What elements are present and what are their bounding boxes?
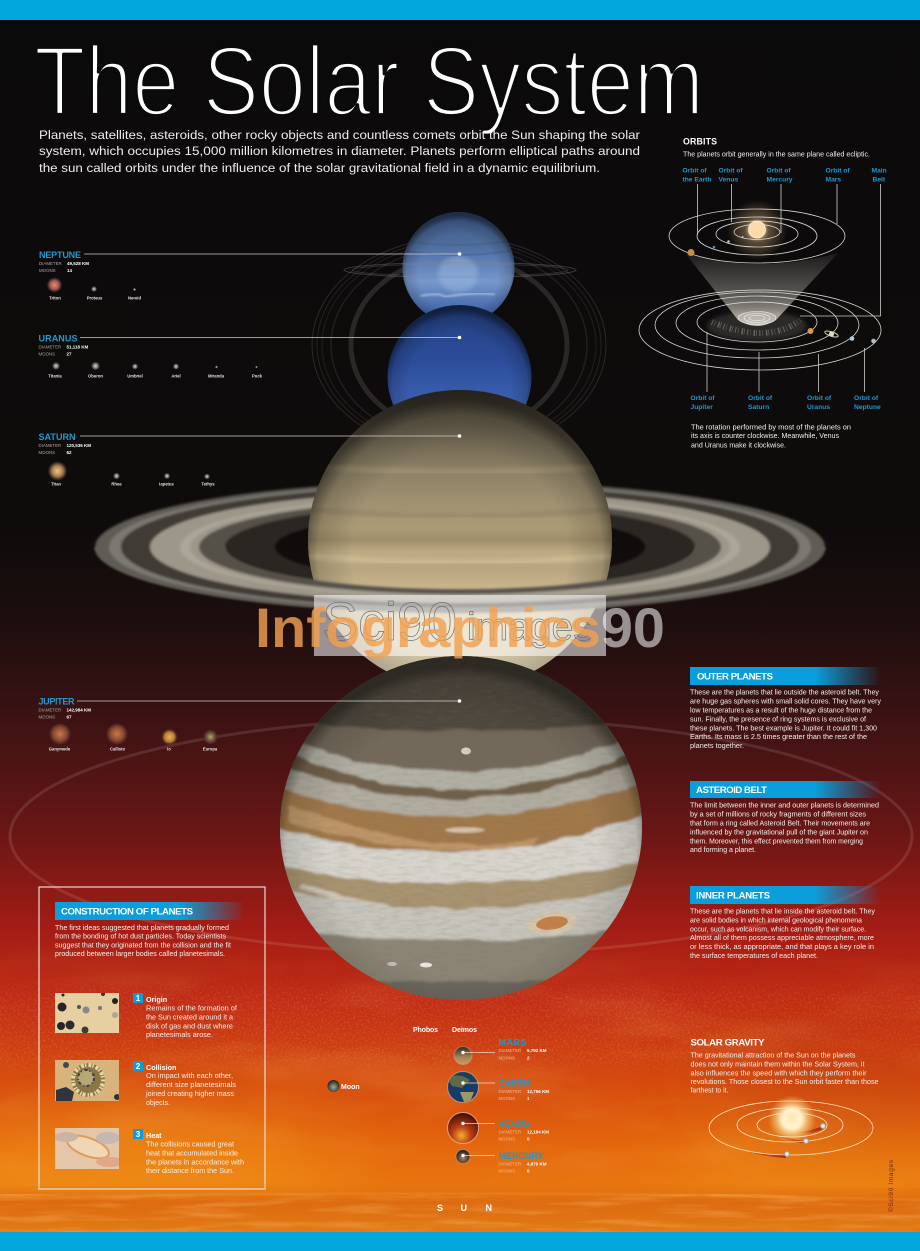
panel: orbits (639, 136, 887, 450)
Saturn rings back (102, 483, 818, 611)
Venus (448, 1112, 549, 1144)
step 1: origin: the Sun created around it a (146, 1014, 233, 1022)
construction intro: The first ideas suggested that planets gradually formed (55, 925, 229, 932)
panel: outer planets: sun. Finally, the presence of ring systems is exclusive of (690, 716, 866, 724)
image: collision (55, 1060, 120, 1101)
panel: outer planets: these planets. The best example is Jupiter. It could fit 1,300 (690, 726, 877, 732)
Saturn label block: 62 (66, 450, 72, 455)
Uranus moons: Oberon (88, 374, 103, 378)
Jupiter label block: 142,984 KM (66, 708, 91, 712)
Mars: 2 (527, 1056, 530, 1060)
Saturn moons: Tethys (201, 482, 215, 486)
intro text: Planets, satellites, asteroids, other rocky objects and countless comets orbit the Sun shaping the solar (39, 128, 640, 142)
Uranus moons: Umbriel (127, 374, 143, 378)
Uranus moons: Titania (48, 374, 62, 378)
panel: asteroid belt: that form a ring called Asteroid Belt. Their movements are (690, 820, 870, 828)
Jupiter planet (270, 650, 650, 1010)
Uranus label block: 27 (66, 352, 72, 356)
Uranus label block (38, 334, 461, 356)
moon labels Phobos and Deimos: Phobos (413, 1027, 438, 1034)
Jupiter label block (38, 696, 461, 720)
Saturn label block: MOONS (38, 450, 55, 455)
upper orbit labels: Venus (718, 176, 738, 184)
Saturn moons (48, 461, 215, 486)
panel: inner planets: These are the planets that lie inside the asteroid belt. They (690, 908, 876, 916)
step 2: collision (133, 1061, 237, 1107)
step 2: collision: Collision (146, 1063, 176, 1072)
step 1: origin: planetesimals arose. (146, 1032, 213, 1039)
panel: solar gravity: farthest to it. (690, 1088, 729, 1094)
Jupiter moons: Io (167, 746, 171, 752)
Saturn label block: 120,536 KM (66, 443, 91, 448)
Uranus moons: Puck (252, 374, 263, 378)
step 3: heat: the planets in accordance with (146, 1160, 244, 1166)
step 2: collision: different size planetesimals (146, 1082, 237, 1089)
lower orbit labels: Saturn (748, 404, 769, 411)
intro text (39, 128, 640, 175)
sun label (437, 1203, 492, 1213)
Uranus moons: Miranda (208, 374, 225, 378)
Mars: 6,792 KM (527, 1048, 547, 1053)
Earth: 12,756 KM (527, 1089, 549, 1094)
construction heading (55, 902, 245, 920)
upper orbit labels (682, 168, 887, 184)
orbits note: The rotation performed by most of the planets on (691, 424, 851, 432)
Mars: DIAMETER (498, 1048, 521, 1053)
lower orbit labels (690, 395, 881, 411)
Jupiter label block: JUPITER (38, 696, 75, 706)
Venus: MOONS (498, 1136, 515, 1142)
panel: asteroid belt: The limit between the inner and outer planets is determined (690, 802, 879, 810)
step 3: heat (133, 1129, 244, 1175)
Neptune moons: Proteus (87, 296, 103, 300)
step 3: heat: 3 (136, 1130, 141, 1139)
panel: inner planets: are solid bodies in which internal geological phenomena (690, 918, 862, 924)
moon: Moon (341, 1084, 360, 1091)
panel: inner planets: INNER PLANETS (696, 890, 771, 902)
panel: inner planets (690, 886, 881, 960)
Neptune label block: MOONS (39, 268, 56, 273)
Earth: EARTH (498, 1078, 530, 1088)
panel: outer planets: OUTER PLANETS (697, 672, 774, 682)
step 1: origin (133, 993, 237, 1039)
Uranus planet (388, 305, 532, 449)
Mercury: 4,879 KM (527, 1162, 547, 1166)
upper orbit labels: Orbit of (826, 168, 850, 174)
Earth (447, 1072, 549, 1102)
panel: solar gravity: The gravitational attraction of the Sun on the planets (690, 1052, 856, 1060)
Jupiter moons: Ganymede (49, 746, 71, 752)
leader lines (698, 184, 880, 392)
Jupiter label block: 67 (66, 714, 72, 720)
Saturn label block: SATURN (38, 432, 76, 442)
planet orbit rings behind Neptune and Uranus (312, 237, 606, 453)
panel: asteroid belt: them. Moreover, this effect prevented them from merging (690, 838, 863, 846)
moon labels Phobos and Deimos (413, 1027, 477, 1034)
background gradient (0, 557, 920, 1202)
upper orbits (669, 209, 845, 263)
Neptune ring (344, 262, 576, 278)
panel: outer planets: These are the planets that lie outside the asteroid belt. They (690, 690, 879, 696)
Neptune label block: 14 (67, 268, 73, 273)
panel: construction of planets (39, 887, 265, 1189)
Uranus label block: MOONS (38, 352, 55, 356)
construction intro (55, 925, 231, 958)
diagram inner sun disk (738, 312, 776, 324)
image: heat (54, 1128, 124, 1169)
Jupiter label block: DIAMETER (38, 708, 61, 712)
asteroid belt ring (10, 718, 912, 954)
upper orbit labels: Mercury (766, 176, 793, 184)
sun surface (0, 1182, 920, 1232)
title: The Solar System (34, 26, 704, 136)
lower orbit labels: Orbit of (807, 395, 832, 402)
panel: inner planets: or less thick, as appropriate, and that plays a key role in (690, 944, 874, 951)
panel: asteroid belt: ASTEROID BELT (696, 785, 767, 796)
step 1: origin: disk of gas and dust where (146, 1024, 233, 1030)
Saturn moons: Titan (51, 482, 61, 486)
panel: solar gravity: revolutions. Those closest to the Sun orbit faster than those (690, 1079, 879, 1086)
panel: outer planets: low temperatures as a result of the huge distance from the (690, 708, 872, 714)
Neptune moons (46, 277, 141, 300)
panel: asteroid belt: and forming a planet. (690, 847, 756, 854)
Mercury: 0 (527, 1168, 530, 1174)
upper orbit labels: Orbit of (682, 168, 707, 174)
diagram lower orbits (639, 290, 881, 370)
upper orbit labels: Orbit of (766, 168, 791, 174)
diagram projection cone (685, 253, 838, 326)
upper orbit labels: Mars (826, 176, 841, 184)
panel: outer planets: planets together. (690, 743, 744, 750)
Jupiter moons: Callisto (110, 746, 126, 752)
orbits heading: ORBITS (683, 136, 717, 146)
orbit planets (688, 236, 876, 343)
panel: outer planets (690, 667, 881, 750)
step 1: origin: 1 (136, 994, 141, 1003)
orbits note (691, 424, 851, 450)
Mars: MARS (498, 1038, 526, 1048)
panel: inner planets: Almost all of them possess appreciable atmosphere, more (690, 935, 874, 942)
image credit: ©Sci90 Images (887, 1159, 895, 1212)
panel: solar gravity: SOLAR GRAVITY (690, 1038, 765, 1048)
step 3: heat: their distance from the Sun. (146, 1168, 234, 1175)
Saturn label block: DIAMETER (38, 443, 61, 448)
construction intro: produced between larger bodies called planetesimals. (55, 951, 225, 958)
Uranus label block: 51,118 KM (66, 344, 89, 350)
Saturn rings front (94, 547, 826, 614)
lower orbit labels: Orbit of (854, 395, 879, 402)
upper orbit labels: Main (872, 168, 887, 174)
lower orbit labels: Jupiter (690, 404, 713, 411)
intro text: the sun called orbits under the influence of the solar gravitational field in a dynamic equilibrium. (39, 161, 600, 175)
top band (0, 0, 920, 20)
panel: asteroid belt (690, 781, 881, 854)
Mercury: MERCURY (498, 1151, 544, 1161)
Neptune moons: Nereid (128, 296, 141, 300)
Mercury: DIAMETER (498, 1162, 521, 1166)
panel: asteroid belt: by a set of millions of rocky fragments of different sizes (690, 812, 867, 818)
watermark: images (467, 606, 593, 649)
sun label: U (460, 1203, 467, 1213)
Mars (454, 1038, 547, 1064)
sun disc (748, 221, 766, 238)
upper sun glow (727, 200, 787, 260)
lower orbit labels: Orbit of (690, 395, 715, 402)
orbits note: its axis is counter clockwise. Meanwhile, Venus (691, 433, 839, 440)
Saturn moons: Iapetus (159, 482, 174, 486)
upper orbit labels: Belt (872, 176, 886, 184)
upper orbit labels: the Earth (682, 176, 711, 184)
panel: outer planets: are huge gas spheres with small solid cores. They have very (690, 698, 881, 706)
Uranus label block: DIAMETER (38, 344, 61, 350)
construction heading: CONSTRUCTION OF PLANETS (61, 906, 194, 918)
Saturn planet (308, 390, 612, 672)
Saturn moons: Rhea (111, 482, 122, 486)
Jupiter moons (49, 723, 218, 752)
Neptune label block: NEPTUNE (39, 250, 81, 260)
Neptune label block: DIAMETER (39, 261, 62, 266)
solar gravity diagram (709, 1095, 873, 1158)
Venus: 12,104 KM (527, 1130, 549, 1134)
sun label: S (437, 1203, 443, 1213)
Mercury (456, 1150, 547, 1174)
Earth: MOONS (498, 1096, 515, 1101)
Mercury: MOONS (498, 1168, 515, 1174)
Jupiter label block: MOONS (38, 714, 55, 720)
panel: solar gravity: also influences the speed with which they perform their (690, 1070, 867, 1078)
upper orbit labels: Orbit of (718, 168, 743, 174)
Venus: 0 (527, 1136, 530, 1142)
lower orbit labels: Uranus (807, 404, 830, 411)
step 1: origin: Origin (146, 995, 167, 1004)
moon labels Phobos and Deimos: Deimos (452, 1027, 477, 1034)
step 3: heat: Heat (146, 1131, 162, 1140)
Neptune label block: 49,528 KM (67, 261, 89, 266)
step 2: collision: On impact with each other, (146, 1073, 233, 1080)
orbits subtitle: The planets orbit generally in the same plane called ecliptic. (683, 152, 870, 158)
Neptune planet (402, 212, 514, 314)
sun label: N (486, 1203, 492, 1213)
step 2: collision: 2 (136, 1062, 141, 1071)
panel: asteroid belt: influenced by the gravitational pull of the giant Jupiter on (690, 830, 868, 836)
panel: inner planets: the surface temperatures of each planet. (690, 953, 818, 960)
moon (328, 1080, 360, 1092)
image: origin (55, 992, 119, 1034)
step 2: collision: joined creating higher mass (145, 1091, 235, 1098)
Jupiter moons: Europa (203, 746, 218, 752)
panel: solar gravity: does not only maintain them within the Solar System, it (690, 1062, 865, 1068)
lower orbit labels: Neptune (854, 404, 881, 411)
Mars: MOONS (498, 1056, 515, 1060)
step 2: collision: objects. (146, 1100, 170, 1107)
step 3: heat: heat that accumulated inside (146, 1150, 238, 1158)
step 1: origin: Remains of the formation of (146, 1006, 237, 1012)
Venus: VENUS (498, 1119, 530, 1129)
watermark: Sci90 (322, 592, 457, 652)
Uranus moons (48, 362, 263, 378)
bottom band (0, 1232, 920, 1251)
Uranus moons: Ariel (171, 374, 181, 378)
intro text: system, which occupies 15,000 million kilometres in diameter. Planets perform elliptical paths around (39, 144, 640, 158)
panel: inner planets: occur, such as volcanism, which can modify their surface. (690, 926, 866, 934)
construction intro: suggest that they originated from the collision and the fit (55, 942, 231, 950)
panel: outer planets: Earths. Its mass is 2.5 times greater than the rest of the (690, 734, 867, 741)
Earth: 1 (527, 1096, 530, 1101)
construction intro: from the bonding of hot dust particles. Today scientists (55, 934, 227, 940)
lower orbit labels: Orbit of (748, 395, 773, 402)
Neptune label block (39, 250, 461, 273)
orbits note: and Uranus make it clockwise. (691, 442, 786, 450)
watermark: Infographics90 (255, 596, 665, 659)
step 3: heat: The collisions caused great (146, 1142, 234, 1148)
Uranus label block: URANUS (38, 334, 78, 344)
panel: solar gravity (690, 1038, 879, 1158)
Neptune moons: Triton (49, 296, 61, 300)
Earth: DIAMETER (498, 1089, 521, 1094)
Saturn label block (38, 432, 461, 455)
Venus: DIAMETER (498, 1130, 521, 1134)
